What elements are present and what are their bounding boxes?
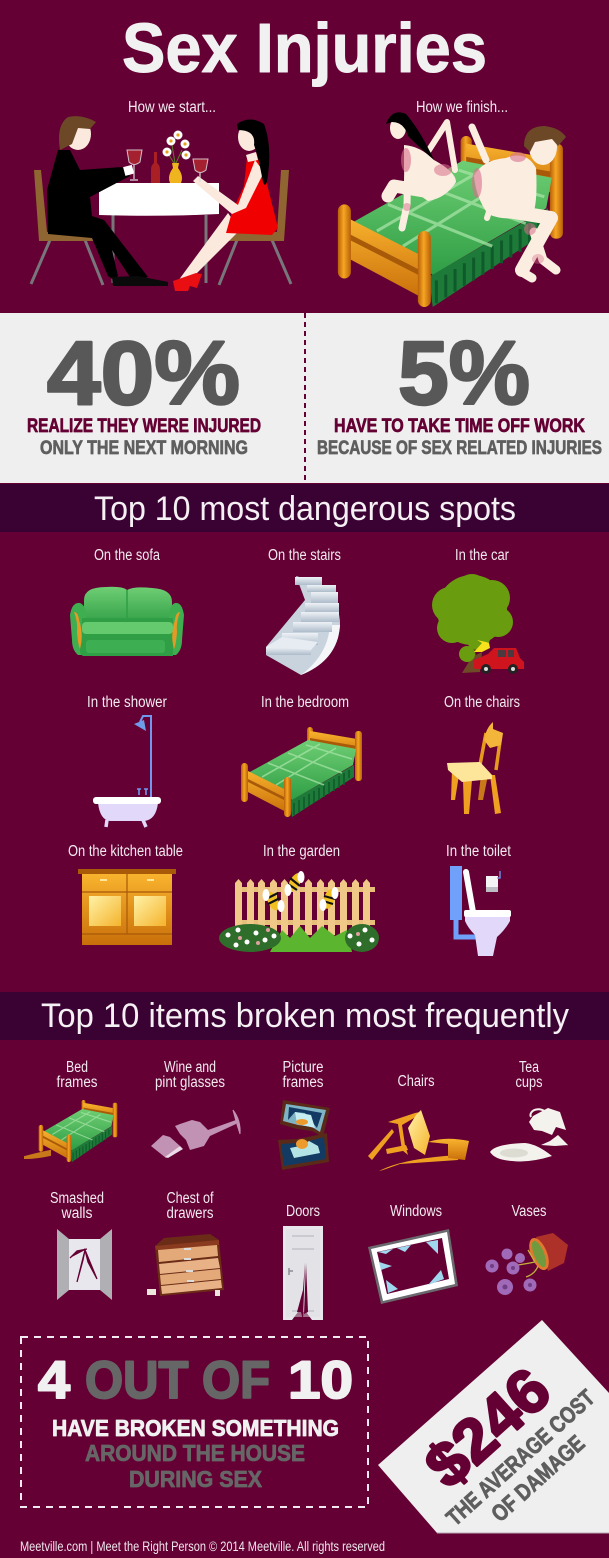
spot: car and tree <box>432 547 524 674</box>
callout: 4 out of 10: AROUND THE HOUSE <box>85 1440 305 1466</box>
spot: bedroom: In the bedroom <box>261 694 349 711</box>
scene: how we finish <box>338 99 566 307</box>
callout: average cost of damage: $246 <box>412 1355 564 1501</box>
section heading: dangerous spots <box>0 484 609 532</box>
injured figure left <box>386 112 456 228</box>
spot: stairs <box>266 547 341 675</box>
footer: Meetville.com | Meet the Right Person © 2014 Meetville. All rights reserved <box>20 1538 385 1554</box>
injured figure right <box>472 126 566 278</box>
scene: how we start <box>31 99 291 291</box>
spot: chairs: On the chairs <box>444 694 520 711</box>
item: chairs: Chairs <box>398 1073 435 1090</box>
callout: 4 out of 10: HAVE BROKEN SOMETHING <box>52 1415 339 1441</box>
item: smashed walls: walls <box>61 1205 93 1222</box>
callout: 4 out of 10 <box>21 1337 368 1507</box>
right chair <box>219 170 291 285</box>
spot: garden: In the garden <box>263 843 340 860</box>
item: chest of drawers: drawers <box>166 1205 214 1222</box>
stat: 40 percent: ONLY THE NEXT MORNING <box>40 438 248 459</box>
spot: shower <box>87 694 167 827</box>
stat: 40 percent: REALIZE THEY WERE INJURED <box>27 416 261 437</box>
spot: garden <box>219 843 379 952</box>
item: wine glasses: pint glasses <box>155 1074 225 1091</box>
spot: car and tree: In the car <box>455 547 509 564</box>
vase and flowers <box>162 130 190 183</box>
item: picture frames: Picture <box>282 1059 324 1076</box>
bees <box>262 871 338 912</box>
callout: average cost of damage <box>378 1320 609 1533</box>
item: smashed walls: Smashed <box>50 1190 104 1207</box>
spot: toilet <box>446 843 512 956</box>
stat: 5 percent <box>317 324 602 459</box>
callout: average cost of damage: OF DAMAGE <box>486 1430 590 1527</box>
stat: 5 percent: 5% <box>398 324 530 424</box>
large bed <box>338 136 563 307</box>
item: tea cups <box>490 1059 569 1161</box>
spot: chairs <box>444 694 520 814</box>
label: how we start: How we start... <box>128 99 216 116</box>
callout: 4 out of 10: DURING SEX <box>129 1466 263 1492</box>
item: bed frames: frames <box>56 1074 98 1091</box>
headline stat <box>38 1351 353 1410</box>
woman in red dress <box>173 120 278 291</box>
item: vases <box>486 1203 568 1295</box>
left chair <box>31 170 103 285</box>
item: bed frames <box>25 1059 117 1162</box>
item: bed frames: Bed <box>66 1059 88 1076</box>
item: tea cups: Tea <box>519 1059 539 1076</box>
spot: kitchen table <box>68 843 183 945</box>
headline stat: 4 <box>38 1351 71 1410</box>
spot: sofa <box>70 547 184 656</box>
stats panel <box>0 313 609 483</box>
section heading: dangerous spots: Top 10 most dangerous spots <box>94 490 516 528</box>
item: picture frames <box>278 1059 330 1170</box>
item: vases: Vases <box>512 1203 547 1220</box>
item: picture frames: frames <box>282 1074 324 1091</box>
man in black suit <box>47 116 168 286</box>
stat: 40 percent: 40% <box>47 324 240 424</box>
headline stat: OUT OF <box>85 1351 270 1410</box>
item: tea cups: cups <box>516 1074 543 1091</box>
item: windows: Windows <box>390 1203 442 1220</box>
section heading: items broken: Top 10 items broken most frequently <box>41 997 569 1035</box>
spot: sofa: On the sofa <box>94 547 160 564</box>
item: chairs <box>368 1073 469 1171</box>
spot: bedroom <box>241 694 362 817</box>
spot: stairs: On the stairs <box>268 547 341 564</box>
item: wine glasses: Wine and <box>164 1059 216 1076</box>
item: chest of drawers <box>147 1190 224 1296</box>
spot: toilet: In the toilet <box>446 843 512 860</box>
item: doors <box>283 1203 323 1320</box>
wine glasses <box>127 150 208 182</box>
label: how we finish: How we finish... <box>416 99 508 116</box>
item: wine glasses <box>151 1059 240 1158</box>
title: Sex Injuries <box>122 9 487 87</box>
table <box>99 183 219 283</box>
item: smashed walls <box>50 1190 112 1300</box>
item: doors: Doors <box>286 1203 320 1220</box>
headline stat: 10 <box>288 1351 353 1410</box>
item: windows <box>368 1203 458 1304</box>
item: chest of drawers: Chest of <box>166 1190 214 1207</box>
wine bottle <box>151 152 160 183</box>
spot: kitchen table: On the kitchen table <box>68 843 183 860</box>
spot: shower: In the shower <box>87 694 167 711</box>
stat: 40 percent <box>27 324 261 459</box>
